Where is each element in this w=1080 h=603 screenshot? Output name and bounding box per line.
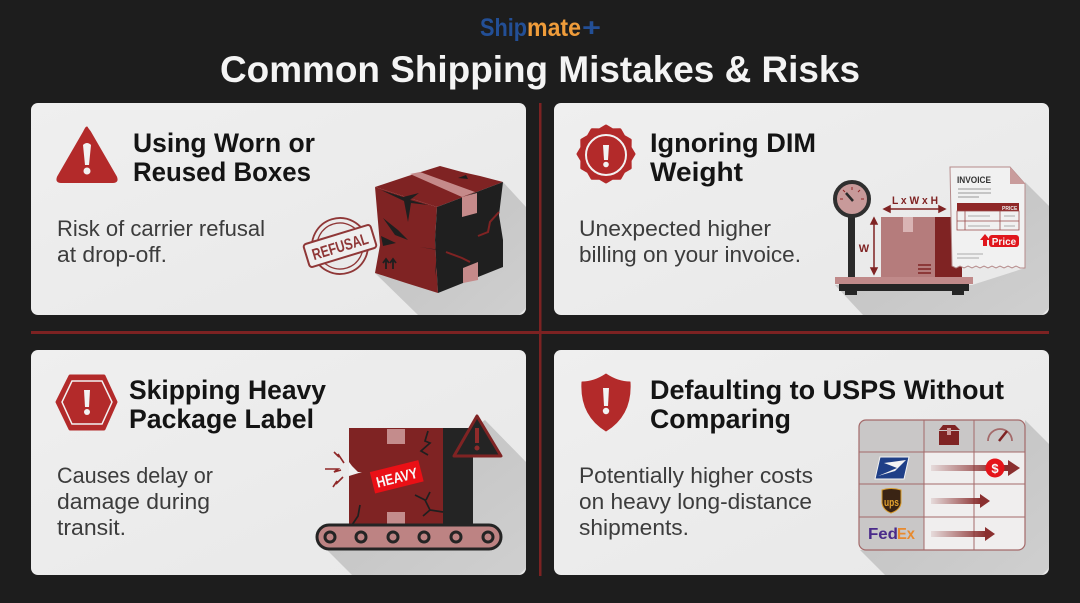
icon: hexagon warning [57,376,116,429]
icon: warning triangle [57,128,117,182]
FedEx row [868,526,915,543]
panel: worn boxes [31,103,526,315]
icon: seal badge [578,126,634,182]
panel: DIM weight [554,103,1049,315]
invoice: PRICE [1002,206,1018,212]
panel: heavy label [31,350,526,575]
icon: shield [582,374,630,431]
UPS row: ups [884,497,899,509]
dividers [31,103,1049,576]
body text: damage during [57,489,210,514]
brand logo: Ship [480,14,527,42]
USPS row [875,457,909,479]
heading: Ignoring DIM [650,128,816,158]
UPS row [882,488,901,513]
heading: Weight [650,157,743,187]
invoice: Price [992,237,1017,248]
brand logo [480,14,601,42]
icon: scale and invoice: L x W x H [892,195,938,207]
invoice: INVOICE [957,175,991,185]
icon: heavy box on conveyor [317,416,526,575]
heading: Package Label [129,404,314,434]
invoice [950,167,1025,268]
body text: billing on your invoice. [579,242,801,267]
FedEx row: Fed [868,526,898,543]
heading: Defaulting to USPS Without [650,375,1004,405]
body text: transit. [57,515,126,540]
body text: on heavy long-distance [579,489,812,514]
body text: at drop-off. [57,242,167,267]
comparison table: $ [991,461,999,476]
FedEx row: Ex [897,526,915,543]
body text: shipments. [579,515,689,540]
panel: USPS default [554,350,1049,575]
icon: refusal stamp: REFUSAL [310,231,371,264]
comparison table [859,420,1049,575]
icon: damaged box [375,166,526,315]
icon: package [939,425,960,445]
heading: Comparing [650,404,791,434]
icon: refusal stamp [298,209,382,283]
body text: Potentially higher costs [579,463,813,488]
icon: scale and invoice [835,167,1049,315]
brand logo: mate [527,14,581,42]
heading: Reused Boxes [133,157,311,187]
icon: heavy box on conveyor: HEAVY [375,465,420,492]
icon: scale and invoice: W [859,243,870,255]
heading: Using Worn or [133,128,315,158]
heading: Skipping Heavy [129,375,326,405]
body text: Risk of carrier refusal [57,216,265,241]
body text: Causes delay or [57,463,213,488]
brand logo: + [582,14,601,42]
body text: Unexpected higher [579,216,772,241]
title: Common Shipping Mistakes & Risks [220,49,860,90]
icon: gauge [988,429,1012,441]
